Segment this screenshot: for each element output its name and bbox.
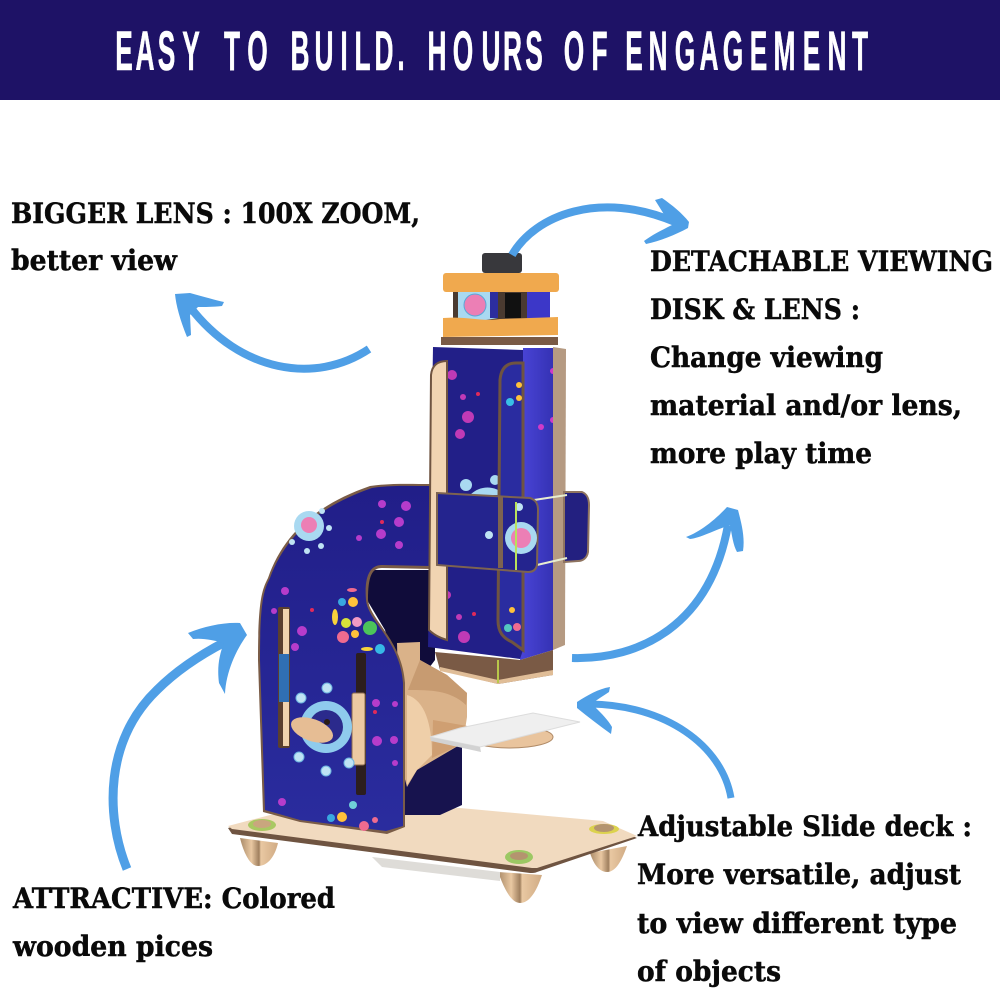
left slot bbox=[278, 607, 290, 748]
callout: attractive bbox=[12, 882, 335, 963]
callout: adjustable slide deck: of objects bbox=[637, 955, 781, 988]
brown plate bbox=[441, 337, 558, 345]
column left wood strip bbox=[429, 361, 447, 640]
callout: adjustable slide deck: Adjustable Slide deck : bbox=[637, 810, 972, 843]
callout: attractive: ATTRACTIVE: Colored bbox=[12, 882, 335, 915]
main arm panel bbox=[258, 484, 432, 834]
corner bolts bbox=[248, 819, 619, 864]
microscope column side panel bbox=[520, 348, 553, 660]
callout: attractive: wooden pices bbox=[12, 930, 213, 963]
callout: bigger lens bbox=[11, 197, 420, 277]
orange lower collar bbox=[443, 317, 558, 337]
pink brain badge on arm bbox=[289, 508, 332, 554]
arrow: to viewing disk bbox=[512, 198, 689, 255]
back stem bbox=[405, 730, 462, 815]
left foot bbox=[240, 838, 278, 866]
flower pattern circle bbox=[332, 588, 385, 654]
callout: adjustable slide deck: to view different type bbox=[637, 907, 957, 940]
callout: adjustable slide deck: More versatile, adjust bbox=[637, 858, 961, 891]
microscope column front panel bbox=[428, 347, 556, 659]
clip band front bbox=[437, 493, 538, 572]
back right foot bbox=[590, 846, 627, 872]
arrow: to bigger lens text bbox=[175, 293, 369, 369]
callout: detachable viewing disk: more play time bbox=[650, 437, 872, 470]
orange top collar bbox=[443, 273, 559, 292]
bottom flower pattern bbox=[327, 801, 378, 831]
arrow: to arm bbox=[113, 623, 247, 869]
right slot bbox=[352, 653, 366, 795]
arrow: to slide deck bbox=[577, 687, 731, 798]
rubber band lines bbox=[534, 495, 567, 565]
wooden slide mechanism bbox=[397, 642, 473, 787]
dial ring and knob bbox=[288, 683, 354, 776]
base board bbox=[228, 808, 637, 873]
callout: detachable viewing disk: DISK & LENS : bbox=[650, 293, 860, 326]
callout: bigger lens: BIGGER LENS : 100X ZOOM, bbox=[11, 197, 420, 230]
callout: detachable viewing disk bbox=[650, 245, 993, 470]
callout: detachable viewing disk: Change viewing bbox=[650, 341, 883, 374]
brown lower collar bbox=[435, 650, 553, 684]
column right wood strip bbox=[553, 347, 566, 650]
dark hole behind arm bbox=[367, 570, 435, 700]
stage disc bbox=[467, 726, 553, 748]
arrow: to detachable text bbox=[572, 507, 744, 658]
callout: bigger lens: better view bbox=[11, 244, 178, 277]
title banner: EASY TO BUILD. HOURS OF ENGAGEMENT bbox=[115, 20, 868, 83]
callout: detachable viewing disk: material and/or lens, bbox=[650, 389, 962, 422]
rear clip tab bbox=[564, 492, 589, 562]
microscope product illustration bbox=[228, 253, 637, 903]
column centre strip bbox=[498, 363, 523, 650]
glass slide bbox=[430, 713, 580, 752]
upper neck bbox=[453, 290, 550, 322]
title banner bbox=[0, 0, 1000, 100]
front foot bbox=[498, 872, 542, 903]
callout: adjustable slide deck bbox=[637, 810, 972, 988]
black eyepiece bbox=[482, 253, 522, 273]
grey underside bbox=[372, 857, 500, 881]
